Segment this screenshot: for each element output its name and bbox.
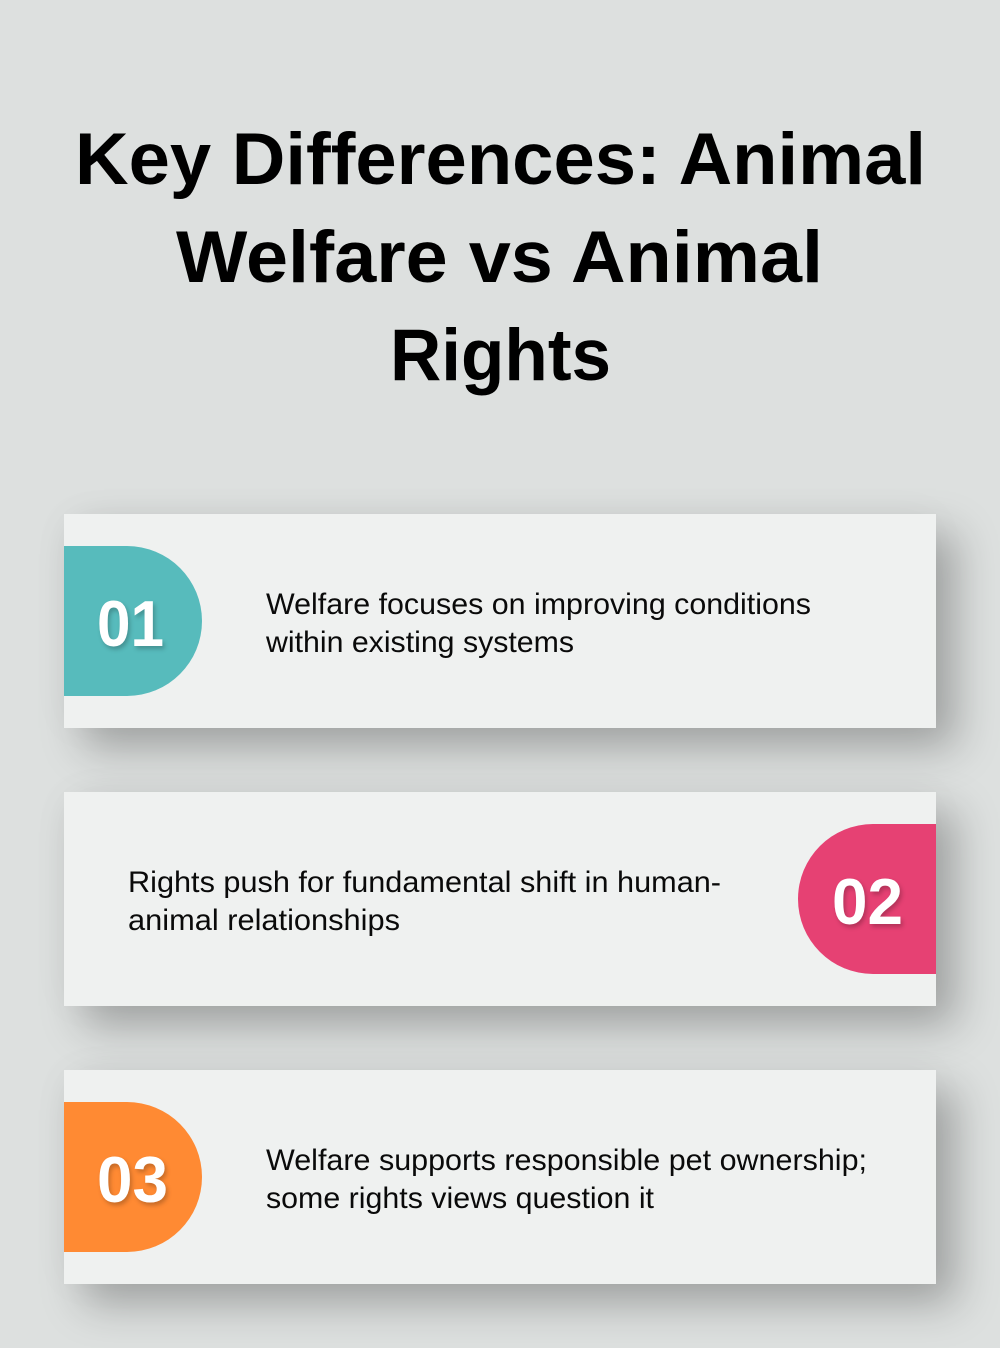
badge: 03: 03 bbox=[97, 1143, 168, 1216]
panel: card 02 bbox=[64, 792, 936, 1006]
text: welfare focuses on conditions bbox=[265, 588, 811, 659]
badge: 03 bbox=[64, 1102, 202, 1252]
text: rights push for fundamental shift: animal relationships bbox=[128, 904, 400, 937]
panel: card 03 bbox=[64, 1070, 936, 1284]
text: welfare focuses on conditions: within existing systems bbox=[265, 626, 574, 659]
text: pet ownership bbox=[266, 1144, 867, 1215]
title: Key Differences: Animal bbox=[75, 119, 926, 200]
text: rights push for fundamental shift: Rights push for fundamental shift in human- bbox=[128, 866, 721, 899]
badge: 02: 02 bbox=[832, 865, 903, 938]
text: pet ownership: some rights views question it bbox=[266, 1182, 654, 1215]
title: Rights bbox=[390, 315, 611, 396]
panel: card 01 bbox=[64, 514, 936, 728]
title bbox=[75, 119, 926, 396]
badge: 01: 01 bbox=[97, 587, 164, 660]
title: Welfare vs Animal bbox=[176, 217, 823, 298]
badge: 02 bbox=[798, 824, 936, 974]
badge: 01 bbox=[64, 546, 202, 696]
text: welfare focuses on conditions: Welfare focuses on improving conditions bbox=[266, 588, 811, 621]
text: pet ownership: Welfare supports responsible pet ownership; bbox=[266, 1144, 867, 1177]
text: rights push for fundamental shift bbox=[128, 866, 721, 937]
